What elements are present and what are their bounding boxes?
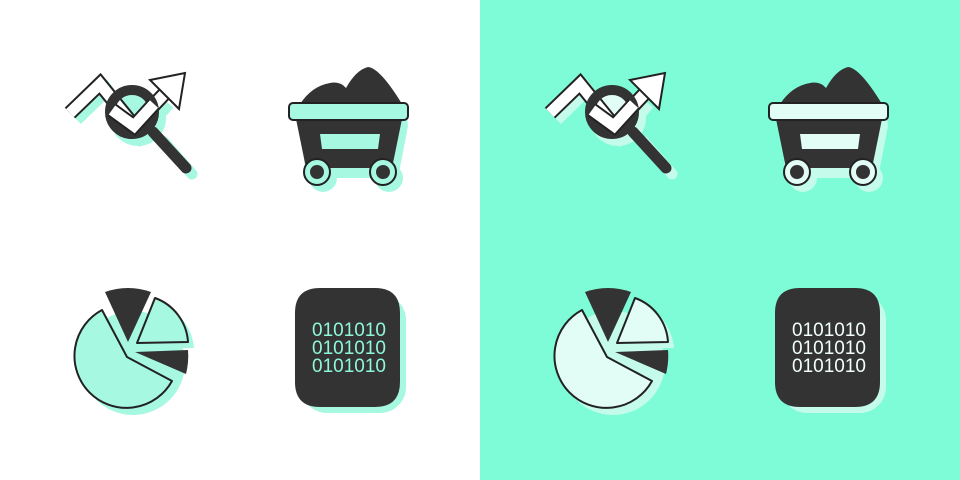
binary text: 0101010 [792, 338, 866, 359]
binary text: 0101010 [792, 356, 866, 377]
icon: binary code chip (left) [295, 288, 406, 413]
icon: pie chart (right) [554, 288, 674, 415]
binary text: 0101010 [312, 320, 386, 341]
icon: binary code chip (right) [775, 288, 886, 413]
binary text: 0101010 [312, 338, 386, 359]
icon: mine cart (left) [289, 67, 408, 192]
icon: pie chart (left) [74, 288, 194, 415]
panel: white background [0, 0, 480, 480]
icon: chart with magnifier (right) [550, 73, 672, 174]
binary text: 0101010 [792, 320, 866, 341]
icon: chart with magnifier (left) [70, 73, 192, 174]
binary text [312, 320, 386, 377]
binary text [792, 320, 866, 377]
icon: mine cart (right) [769, 67, 888, 192]
binary text: 0101010 [312, 356, 386, 377]
panel: teal background [480, 0, 960, 480]
